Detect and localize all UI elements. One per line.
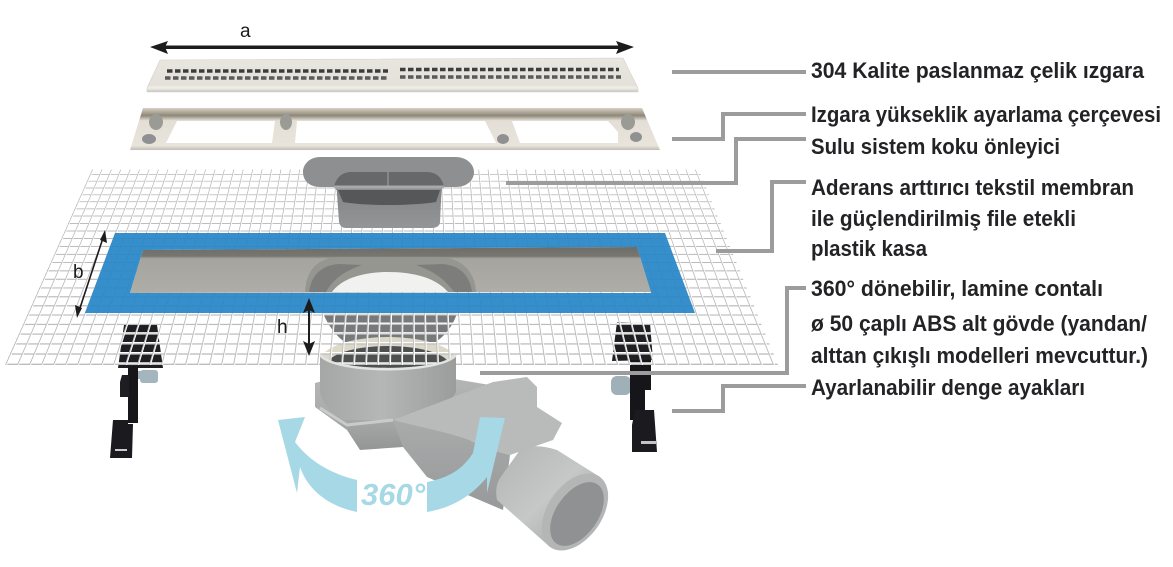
icon: dome under trough bbox=[323, 313, 457, 350]
panel: blue membrane frame bbox=[85, 233, 695, 313]
icon: grey lower body bbox=[315, 355, 562, 510]
arrow: dimension b bbox=[75, 230, 107, 318]
text: plastic body label: plastik kasa bbox=[811, 236, 927, 261]
arrow: leader line feet bbox=[672, 386, 806, 411]
text: dimension h label: h bbox=[277, 317, 288, 338]
arrow: leader line plastic body bbox=[716, 182, 806, 251]
arrow: leader line frame bbox=[672, 114, 806, 139]
text: dimension a label: a bbox=[240, 21, 251, 42]
arrow: leader line lower body bbox=[480, 288, 806, 373]
arrow: leader line odor trap bbox=[506, 139, 806, 183]
panel: stainless steel grate bbox=[147, 58, 638, 92]
text: plastic body label: Aderans arttırıcı tekstil membran bbox=[811, 175, 1134, 200]
text: plastic body label bbox=[811, 175, 1134, 261]
text: lower body label: ø 50 çaplı ABS alt gövde (yandan/ bbox=[811, 311, 1148, 336]
text: lower body label: 360° dönebilir, lamine contalı bbox=[811, 276, 1103, 301]
icon: collar ring bbox=[320, 337, 456, 385]
text: odor trap label: Sulu sistem koku önleyici bbox=[811, 134, 1060, 159]
arrow: leader line grate bbox=[672, 70, 806, 74]
icon: left adjustable foot bbox=[110, 325, 163, 458]
text: plastic body label: ile güçlendirilmiş file etekli bbox=[811, 206, 1076, 231]
icon: right adjustable foot bbox=[611, 322, 657, 452]
arrow: 360 rotation bbox=[278, 417, 505, 512]
arrow: dimension h bbox=[303, 298, 315, 356]
text: feet label: Ayarlanabilir denge ayakları bbox=[811, 375, 1085, 400]
text: 360 degree label: 360° bbox=[361, 477, 426, 512]
text: grate label: 304 Kalite paslanmaz çelik ızgara bbox=[811, 58, 1144, 83]
icon: odor trap bbox=[303, 157, 474, 228]
panel: height adjustment frame bbox=[130, 108, 660, 150]
text: lower body label bbox=[811, 276, 1148, 368]
panel: trough interior bbox=[130, 247, 651, 293]
text: dimension b label: b bbox=[73, 262, 84, 283]
icon: outlet pipe bbox=[496, 446, 622, 563]
arrow: dimension a bbox=[150, 41, 634, 54]
text: lower body label: alttan çıkışlı modelleri mevcuttur.) bbox=[811, 343, 1148, 368]
